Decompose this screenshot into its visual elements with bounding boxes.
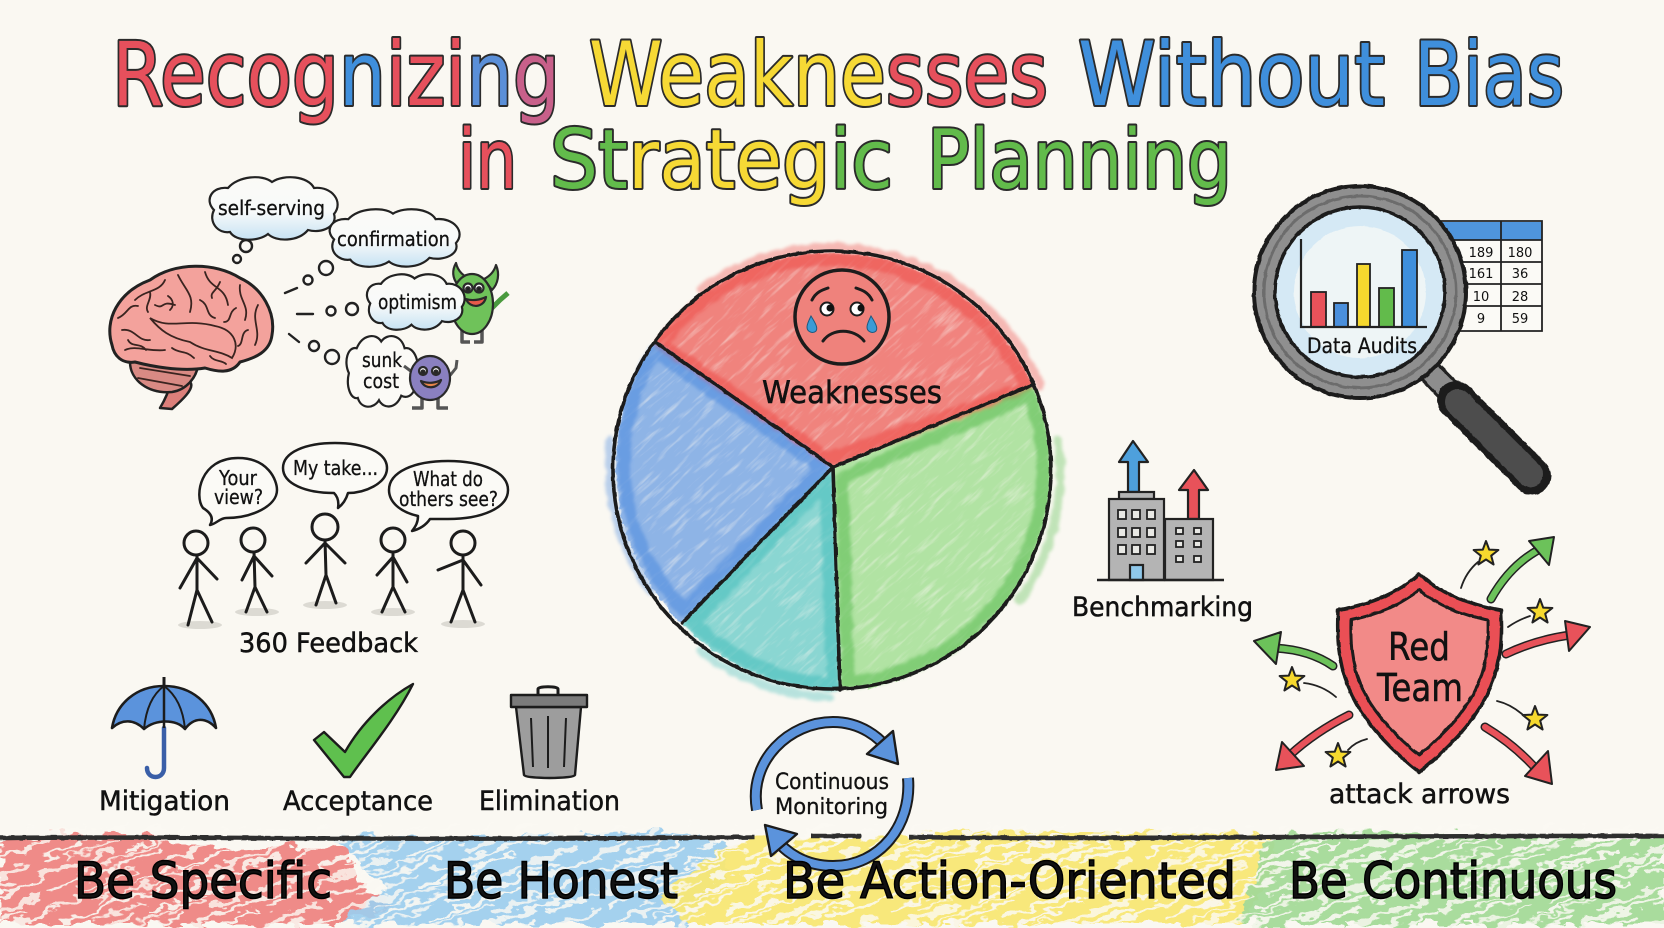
pie solid under-colour [616,253,1050,690]
stick figure 2 [241,528,272,612]
arrow: red down-left [1276,715,1349,770]
title line 2 [458,113,1232,208]
cloud: sunk cost [346,336,418,407]
panel: data audits magnifier [1254,186,1542,476]
footer colour bands [0,826,1664,924]
cloud: confirmation [330,209,460,267]
attack arrows [1254,537,1590,784]
stick figure 1 [180,531,217,625]
icon: crying face [795,270,889,364]
label: red team: Team [1376,666,1463,710]
data table: 189 [1469,246,1493,261]
stick figure 3 [306,514,345,605]
panel: benchmarking [1072,441,1253,623]
panel: 360 feedback [178,443,508,659]
icon: check mark [314,684,413,777]
arrow: red down-right [1485,727,1552,784]
bar chart [1301,239,1427,327]
label: weaknesses: Weaknesses [762,375,942,411]
label: continuous monitoring: Monitoring [775,795,888,820]
cycle arrow: top [756,722,898,810]
data table: 10 [1473,290,1489,305]
icon: red arrow [1179,470,1208,519]
footer divider line [0,836,1664,839]
thought trails [233,240,358,364]
cycle arrow: bottom [765,778,908,866]
title line 2: Planning [927,113,1232,208]
speech bubble: what do others see: What do [413,467,483,491]
label: benchmarking: Benchmarking [1072,592,1253,623]
icon: buildings [1097,492,1224,580]
speech bubble: my take [283,443,387,508]
arrow: red right [1506,621,1590,654]
cloud: confirmation: confirmation [337,227,450,251]
icon: blue arrow [1119,441,1148,492]
ground shadows [178,601,485,629]
arrow: green left [1254,632,1333,666]
principle: be action-oriented: Be Action-Oriented [783,852,1236,910]
pie crayon fills [399,38,1267,906]
data table: 180 [1508,246,1532,261]
data table: 161 [1469,267,1493,282]
data table: 36 [1512,267,1528,282]
title line 2: in [458,113,517,208]
icon: shield [1338,574,1502,772]
title line 2: Strategic [550,113,893,208]
title [112,23,1564,208]
cloud: sunk cost: sunk [362,348,402,372]
label: attack arrows: attack arrows [1329,779,1510,810]
label: continuous monitoring [775,770,889,820]
principle: be specific: Be Specific [74,852,332,910]
cloud: optimism: optimism [378,290,457,314]
data table [1440,221,1542,331]
speech bubble: your view: Your [218,466,258,490]
arrow: green up-right [1491,537,1554,599]
outer crayon bleed [609,247,1060,697]
data table: 28 [1512,290,1528,305]
cloud: self-serving [210,177,338,240]
speech bubble: my take: My take... [293,456,378,480]
label: continuous monitoring: Continuous [775,770,889,795]
data table: 9 [1477,312,1485,327]
label: 360 feedback: 360 Feedback [239,628,418,659]
cloud: sunk cost: cost [363,369,399,393]
icon: umbrella [112,677,216,777]
pie outline [613,251,1051,690]
principle: be continuous: Be Continuous [1289,852,1617,910]
label: mitigation: Mitigation [99,786,230,817]
icon: continuous monitoring cycle [756,722,908,866]
label: red team [1376,625,1463,710]
title line 1 [112,23,1564,126]
icon: green monster [451,263,508,342]
icon: trash can [511,687,587,778]
speech bubble: what do others see [389,461,508,531]
title line 1: Bias [1414,23,1564,126]
icon: brain [110,266,273,409]
cloud: self-serving: self-serving [218,196,325,220]
speech bubble: your view [199,458,277,525]
cloud: optimism [367,274,465,330]
panel: response strategies [99,677,620,817]
pie chart: weaknesses [399,38,1267,906]
impact stars [1280,541,1552,766]
title line 1: Weaknesses [589,23,1048,126]
title line 1: Without [1078,23,1385,126]
label: red team: Red [1388,625,1450,669]
pie saturated crayon edges [624,259,1044,684]
speech bubble: your view: view? [214,485,263,509]
footer principles [74,852,1617,910]
panel: red team [1254,537,1590,810]
speech bubble: what do others see: others see? [399,487,498,511]
stick figure 5 [438,531,481,622]
label: acceptance: Acceptance [283,786,433,817]
title line 1: Recognizing [112,23,560,126]
magnifier handle [1424,366,1532,476]
magnifier lens [1254,186,1466,398]
data table: 59 [1512,312,1528,327]
principle: be honest: Be Honest [444,852,678,910]
panel: cognitive biases brain [110,177,508,409]
label: elimination: Elimination [479,786,620,817]
stick figure 4 [377,528,407,612]
icon: purple monster [404,356,457,408]
label: data audits: Data Audits [1307,334,1417,358]
